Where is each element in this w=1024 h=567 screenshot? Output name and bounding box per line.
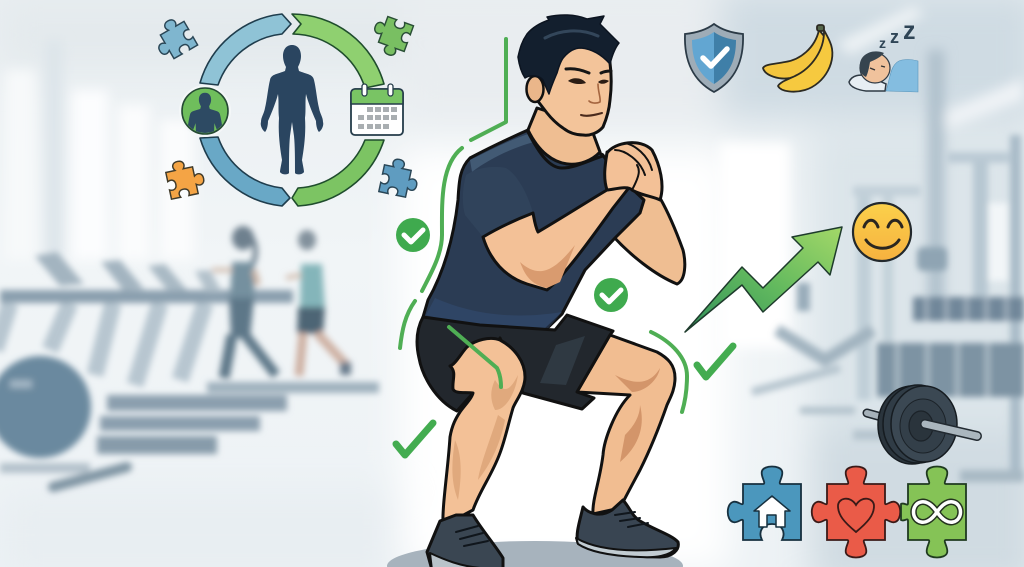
- shorts: [417, 315, 613, 411]
- form guide line: back: [400, 39, 506, 348]
- ground shadow: [387, 541, 683, 567]
- cycle arc: top left: [200, 14, 291, 85]
- far leg: [577, 335, 675, 514]
- cycle diagram: [149, 14, 421, 206]
- icon: sleeping person: [849, 17, 918, 92]
- runner two: [286, 230, 351, 376]
- runner one: [212, 226, 276, 378]
- near arm: [483, 150, 635, 290]
- puzzle piece: home: [728, 466, 801, 540]
- arrow: rising trend: [685, 227, 842, 332]
- icon: sleeping person: z: [879, 35, 886, 51]
- gym equipment right: [752, 135, 1024, 482]
- icon: small body badge: [180, 85, 230, 137]
- neck: [528, 108, 600, 164]
- eyes and brows: [566, 69, 611, 73]
- sleeve near arm: [463, 167, 533, 237]
- icon: puzzle piece orange bottom left: [164, 157, 206, 199]
- icon: central body silhouette: [261, 45, 323, 174]
- nose and mouth: [589, 84, 600, 103]
- hair sheen: [545, 31, 598, 38]
- icon: bananas: [763, 25, 832, 92]
- far shoe: [576, 500, 678, 557]
- face: [537, 40, 611, 135]
- head: [518, 15, 619, 135]
- cycle arc: bottom right: [292, 140, 384, 206]
- near leg shading: [452, 375, 518, 500]
- icon: check mark left: [396, 423, 433, 455]
- cycle arc: top right: [292, 14, 384, 88]
- puzzle piece: heart: [812, 466, 900, 558]
- icon: check badge core: [594, 278, 628, 312]
- puzzle row: home, heart, infinity: [728, 466, 966, 558]
- gym treadmills and wheel: [0, 226, 379, 487]
- torso and shirt: [423, 130, 644, 335]
- icon: smiley: [853, 203, 911, 261]
- icon: sleeping person: z: [890, 27, 899, 47]
- icon: barbell: [867, 385, 977, 464]
- far arm: [612, 190, 685, 284]
- form guide line: shin: [651, 332, 687, 412]
- clasped hands: [605, 143, 662, 200]
- icon: puzzle piece green top right: [368, 14, 413, 59]
- ear: [526, 76, 544, 102]
- far leg shading: [615, 368, 660, 462]
- icon: puzzle piece blue bottom right: [379, 157, 421, 199]
- figure: squatting man: [417, 15, 685, 567]
- collar: [528, 132, 603, 168]
- puzzle piece: infinity: [901, 466, 966, 558]
- shirt shading: [426, 298, 562, 333]
- hair: [518, 15, 619, 94]
- shirt sleeve highlight: [470, 134, 534, 172]
- arm shading: [520, 245, 575, 288]
- cycle arc: bottom left: [200, 137, 290, 206]
- icon: puzzle piece blue top left: [149, 14, 198, 63]
- icon: calendar: [351, 84, 403, 135]
- shorts highlight: [540, 336, 585, 385]
- icon: sleeping person: z: [903, 17, 916, 45]
- near shoe: [427, 515, 503, 567]
- icon: check badge back: [396, 218, 430, 252]
- icon: check mark right: [697, 346, 733, 377]
- icon: shield: [685, 24, 743, 92]
- form guide line: knee: [449, 327, 501, 387]
- near leg: [443, 338, 525, 526]
